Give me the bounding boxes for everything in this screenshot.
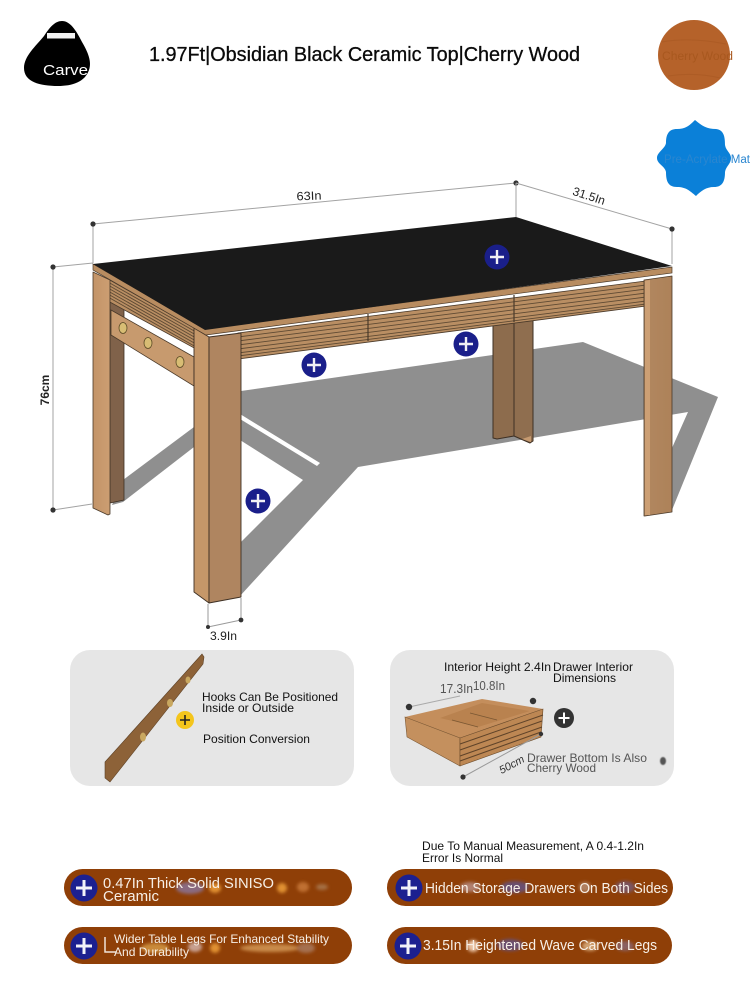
label: 3.15In Heightened Wave Carved Legs xyxy=(423,938,657,954)
label: Hidden Storage Drawers On Both Sides xyxy=(425,881,668,897)
drawer bottom note: Cherry Wood xyxy=(527,761,596,775)
left apron with wave carving xyxy=(108,279,196,349)
icon: carved badge xyxy=(24,21,90,86)
left leg xyxy=(93,272,110,515)
feature pill: ceramic xyxy=(64,869,352,906)
hooks note: Inside or Outside xyxy=(202,701,294,715)
feature pill: wave carved legs xyxy=(387,927,672,964)
front apron with wave carving xyxy=(238,281,646,359)
feature pill: wider legs xyxy=(64,927,352,964)
icon: plus on front apron xyxy=(302,352,326,378)
dimension: height 76cm xyxy=(38,263,93,513)
drawer interior dimensions label: Drawer Interior xyxy=(553,660,633,674)
panel: drawer interior xyxy=(390,650,674,786)
icon: plus xyxy=(394,932,422,960)
measurement note: Due To Manual Measurement, A 0.4-1.2In xyxy=(422,839,644,853)
drawer length dimension xyxy=(460,732,543,780)
feature pill: hidden drawers xyxy=(387,869,673,906)
icon: blue material badge: Pre-Acrylate Mat xyxy=(664,154,750,166)
dimension: depth 31.5In xyxy=(516,183,675,264)
drawer bottom note xyxy=(527,751,647,775)
back leg xyxy=(493,318,533,443)
icon: plus on top xyxy=(484,244,510,270)
front leg xyxy=(194,328,241,603)
label: 0.47In Thick Solid SINISO xyxy=(103,876,274,892)
dimension: leg 3.9In xyxy=(206,598,243,643)
dimension: height 76cm: 76cm xyxy=(38,375,52,405)
dimension: depth 31.5In: 31.5In xyxy=(571,184,607,208)
drawer illustration xyxy=(405,699,543,766)
icon: plus on leg xyxy=(246,488,270,514)
icon: plus xyxy=(70,874,98,902)
icon: carved badge: Carve xyxy=(43,62,88,79)
icon: plus xyxy=(70,932,98,960)
dimension: width 63In: 63In xyxy=(296,189,322,203)
drawer width labels xyxy=(406,679,536,710)
drawer length dimension: 50cm xyxy=(497,754,527,777)
dimension: width 63In xyxy=(90,180,519,263)
hook rail xyxy=(111,310,194,386)
icon: cherry wood swatch xyxy=(658,20,733,90)
ceramic top xyxy=(93,217,672,330)
table illustration xyxy=(93,217,672,603)
drawer interior dimensions label xyxy=(553,660,633,685)
label xyxy=(103,876,274,905)
position conversion label: Position Conversion xyxy=(203,732,310,746)
icon: plus xyxy=(396,874,422,902)
icon: plus on drawer xyxy=(454,332,478,356)
drawer width labels: 17.3In xyxy=(440,682,473,696)
drawer width labels: 10.8In xyxy=(473,679,505,693)
L mark xyxy=(105,937,116,952)
interior height label: Interior Height 2.4In xyxy=(444,660,551,674)
title: 1.97Ft|Obsidian Black Ceramic Top|Cherry Wood xyxy=(149,44,580,66)
label: And Durability xyxy=(114,945,189,959)
icon: cherry wood swatch: Cherry Wood xyxy=(662,51,733,63)
icon: black plus xyxy=(554,708,574,728)
label xyxy=(114,932,329,959)
icon: yellow plus xyxy=(176,711,194,729)
dimension: leg 3.9In: 3.9In xyxy=(210,629,237,643)
hooks note: Hooks Can Be Positioned xyxy=(202,690,338,704)
dark residual mark xyxy=(660,757,666,765)
drawer interior dimensions label: Dimensions xyxy=(553,671,616,685)
floor shadow xyxy=(112,342,718,596)
hooks note xyxy=(202,690,338,715)
icon: blue material badge xyxy=(657,120,750,196)
drawer bottom note: Drawer Bottom Is Also xyxy=(527,751,647,765)
left leg inner face xyxy=(110,300,124,503)
panel: hook position conversion xyxy=(70,650,354,786)
measurement note xyxy=(422,839,644,865)
table edge band xyxy=(93,264,672,335)
measurement note: Error Is Normal xyxy=(422,851,503,865)
right leg xyxy=(644,276,672,516)
label: Wider Table Legs For Enhanced Stability xyxy=(114,932,329,946)
label: Ceramic xyxy=(103,889,159,905)
hook bar illustration xyxy=(105,654,204,782)
